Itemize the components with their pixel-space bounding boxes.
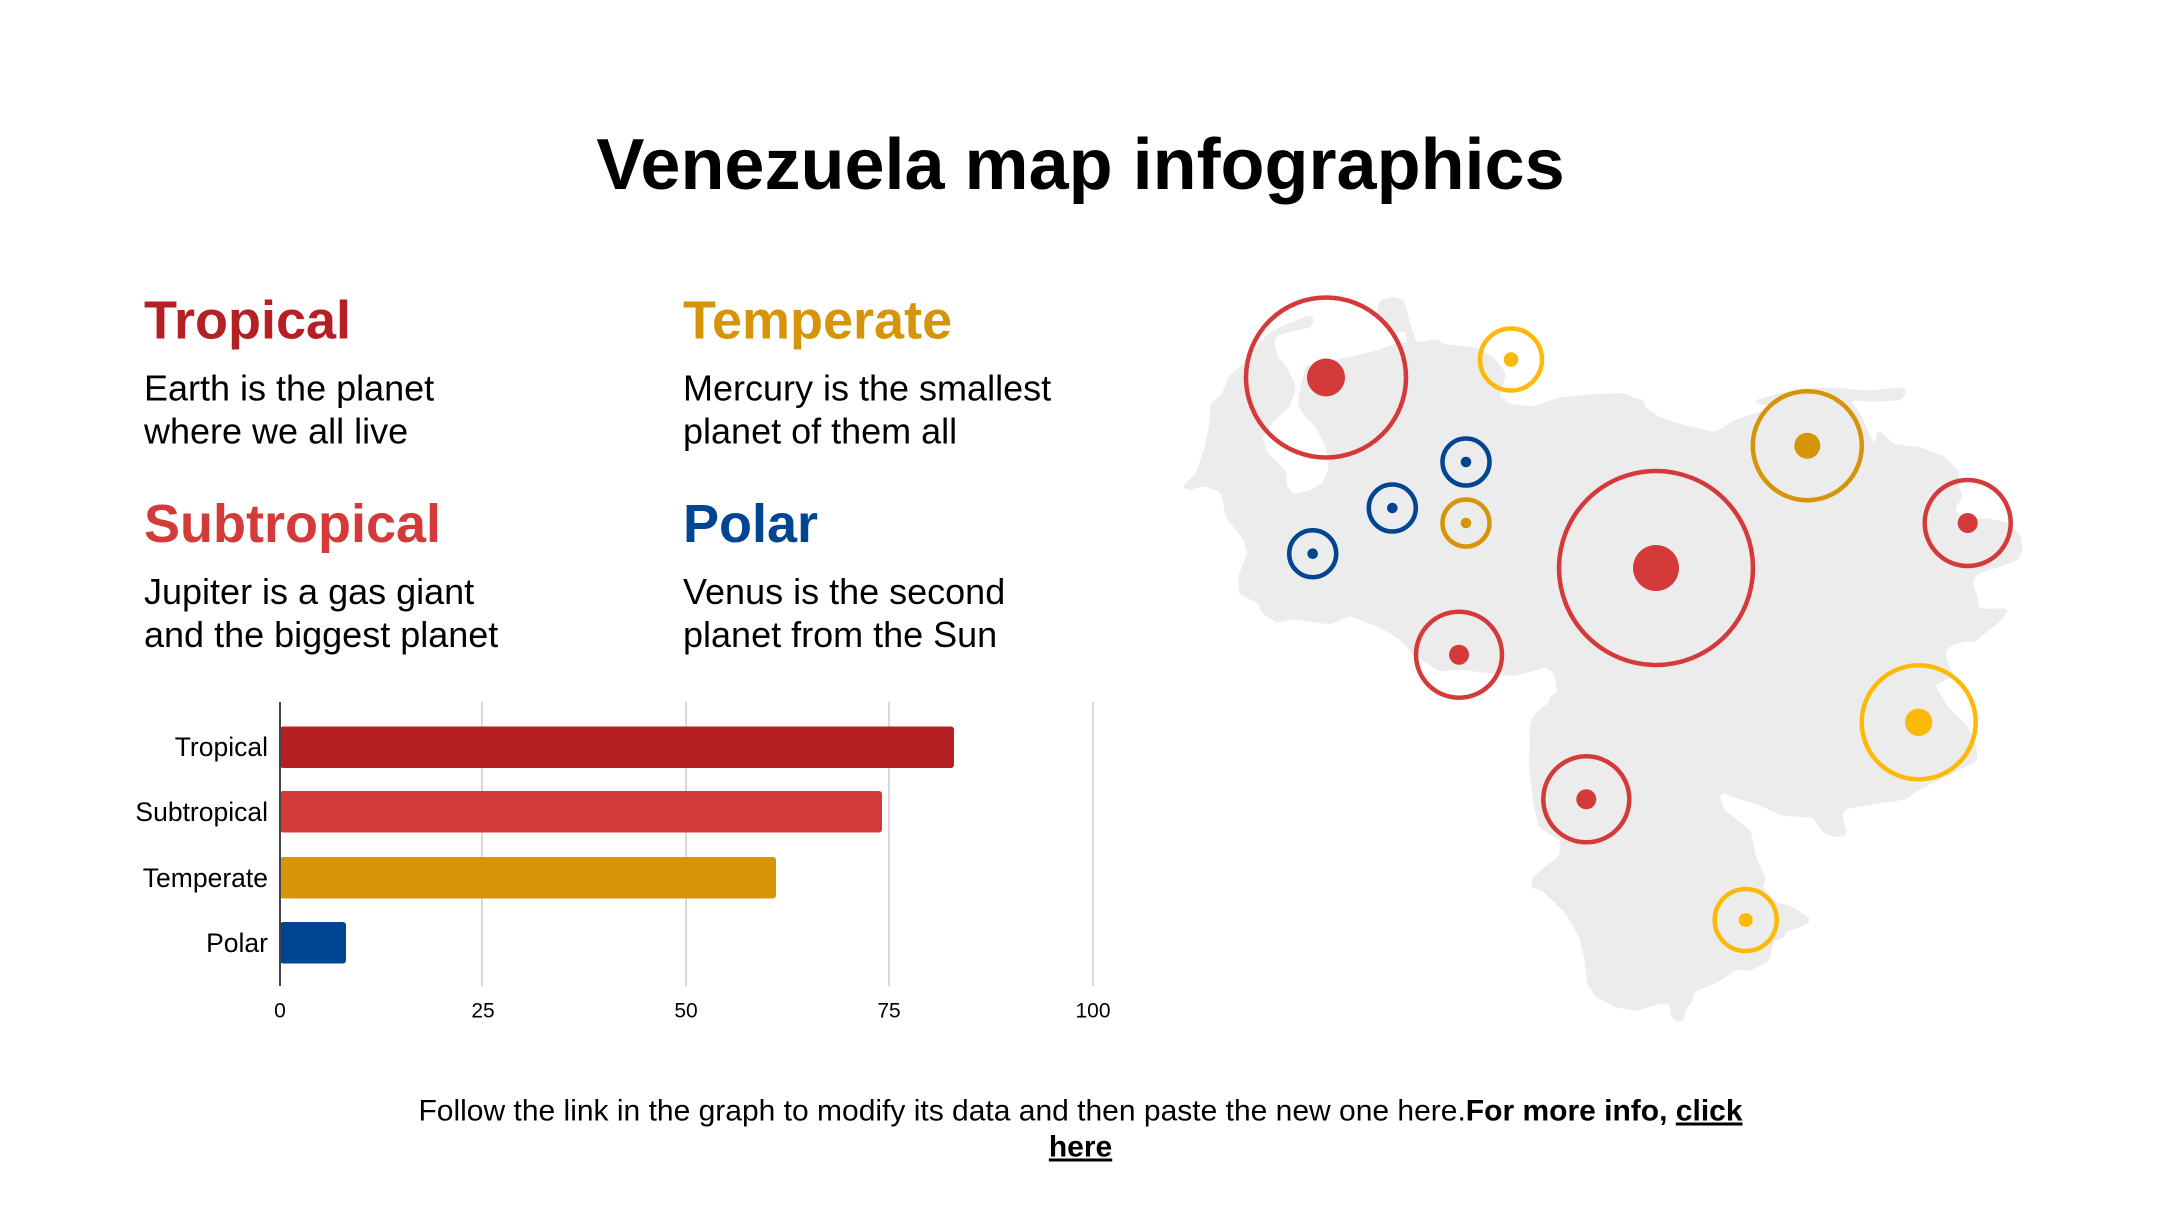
footer note: here <box>1049 1130 1112 1164</box>
axis tick labels: 0 <box>274 1000 286 1022</box>
category labels: Subtropical <box>135 797 268 827</box>
axis tick labels: 50 <box>674 1000 698 1022</box>
footer note: Follow the link in the graph to modify its data and then paste the new one here.For more info, click <box>418 1094 1743 1128</box>
heading: tropical: Tropical <box>144 290 351 350</box>
marker: blue upper <box>1442 438 1490 486</box>
title: Venezuela map infographics <box>596 125 1565 205</box>
marker: yellow south <box>1715 889 1777 951</box>
bar: tropical 83 <box>280 726 954 768</box>
category labels <box>135 732 268 958</box>
marker: yellow north <box>1480 328 1542 390</box>
bar chart <box>135 702 1111 1022</box>
text: polar description: planet from the Sun <box>683 614 997 655</box>
text: subtropical description: Jupiter is a gas giant <box>144 571 474 612</box>
marker: red southwest <box>1416 612 1502 698</box>
panel: tropical <box>143 290 434 452</box>
text: polar description: Venus is the second <box>683 571 1005 612</box>
bar: temperate 61 <box>280 857 776 898</box>
marker: red large northwest <box>1246 298 1406 458</box>
axis tick labels: 25 <box>471 1000 495 1022</box>
category labels: Polar <box>206 928 268 958</box>
marker: ochre small <box>1442 500 1490 546</box>
marker: yellow large east <box>1862 665 1976 779</box>
category labels: Tropical <box>175 732 268 762</box>
panel: subtropical <box>144 494 498 655</box>
panel: polar <box>683 494 1005 655</box>
marker: red south <box>1543 756 1629 842</box>
axis tick labels: 100 <box>1075 1000 1111 1022</box>
marker: blue middle <box>1369 484 1416 532</box>
marker: red large centre <box>1559 471 1753 665</box>
marker: blue lower <box>1289 530 1336 577</box>
text: temperate description: Mercury is the smallest <box>683 368 1051 408</box>
category labels: Temperate <box>143 863 268 893</box>
panel: temperate <box>683 290 1051 452</box>
bar: subtropical 74 <box>280 791 882 832</box>
text: temperate description: planet of them all <box>683 410 957 452</box>
footer note <box>418 1094 1743 1164</box>
axis tick labels: 75 <box>877 1000 901 1022</box>
map of Venezuela <box>1183 297 2022 1021</box>
text: subtropical description: and the biggest planet <box>144 614 498 655</box>
axis tick labels <box>274 1000 1111 1022</box>
text: tropical description: where we all live <box>143 410 408 452</box>
marker: ochre large north <box>1753 391 1862 500</box>
bar: polar 8 <box>280 922 346 964</box>
text: tropical description: Earth is the planet <box>144 368 434 408</box>
heading: temperate: Temperate <box>683 290 952 350</box>
marker: red east <box>1925 480 2011 566</box>
heading: polar: Polar <box>683 494 818 554</box>
heading: subtropical: Subtropical <box>144 494 441 554</box>
